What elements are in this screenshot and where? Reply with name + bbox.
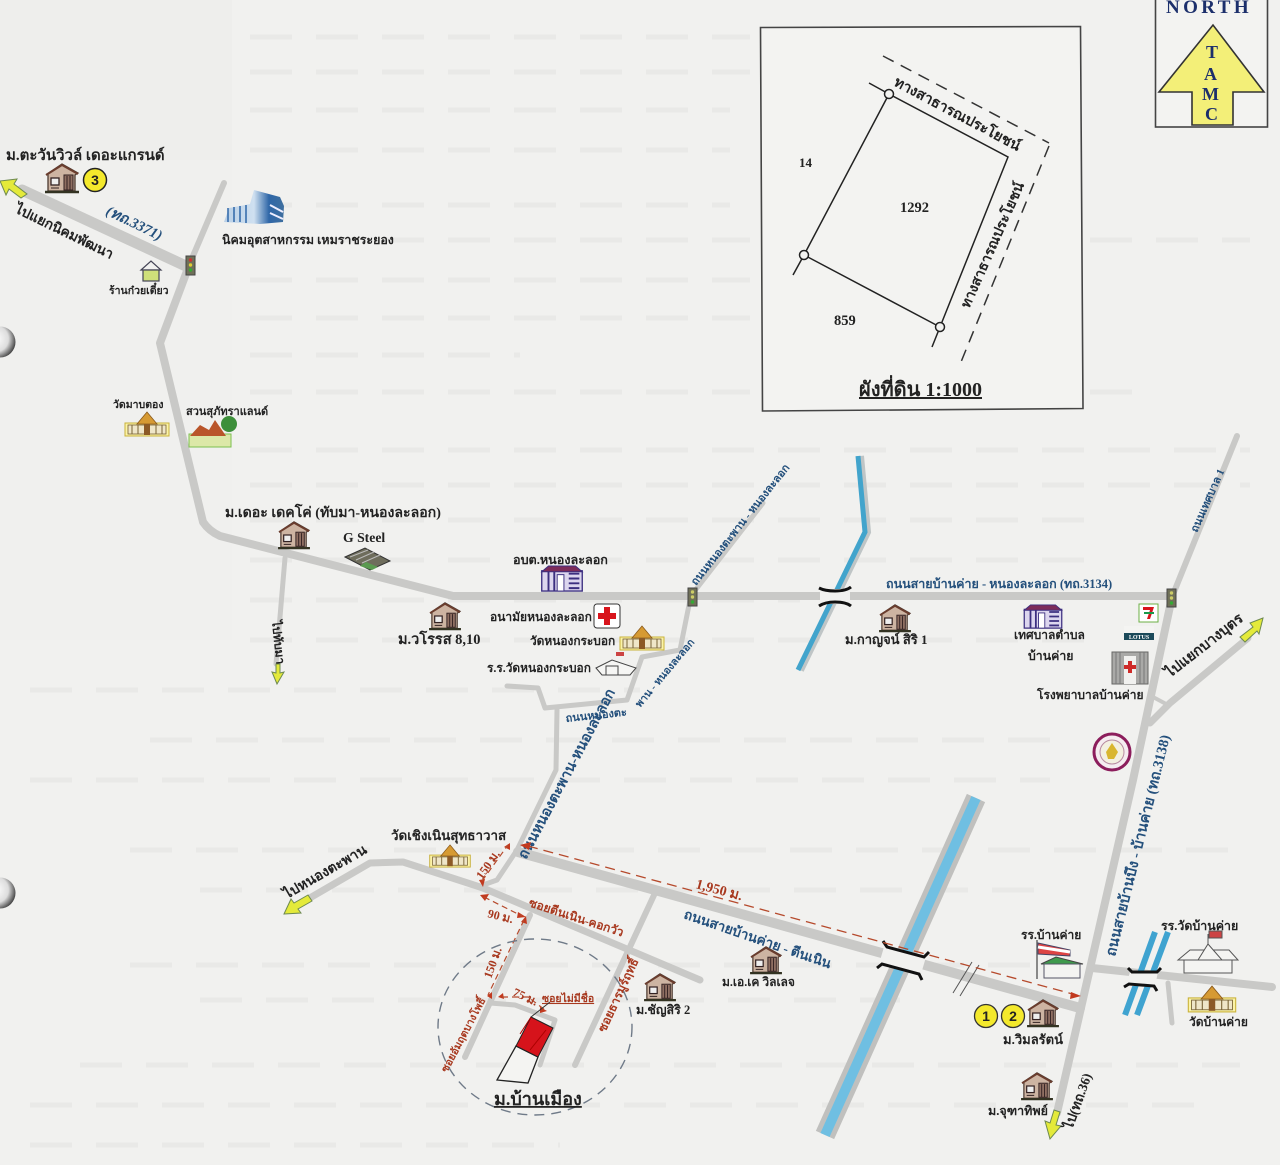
label: hospital: โรงพยาบาลบ้านค่าย	[1036, 687, 1144, 702]
parcel plan panel: 1292	[900, 200, 929, 216]
north arrow panel: M	[1202, 84, 1219, 104]
parcel plan panel: 859	[834, 313, 856, 329]
icon: noodle shop	[141, 261, 161, 281]
road label 3134: ถนนสายบ้านค่าย - หนองละลอก (ทถ.3134)	[886, 577, 1112, 591]
marker 3	[84, 168, 106, 192]
label: noodle shop: ร้านก๋วยเตี๋ยว	[109, 282, 169, 297]
parcel numbers: 14	[799, 155, 812, 170]
binder hole: lower	[0, 878, 16, 908]
distance labels: 150 ม.	[473, 848, 503, 882]
north arrow panel: C	[1205, 104, 1218, 124]
icon: house The Deco	[278, 522, 310, 548]
road label: Nong Tapan vertical: ถนนหนองตะพาน-หนองละลอก	[515, 686, 619, 862]
icon: municipal office	[1024, 605, 1062, 628]
icon: Ban Khai school	[1037, 940, 1083, 979]
parcel plan panel	[760, 26, 1083, 411]
label: Ban Khai school: รร.บ้านค่าย	[1021, 928, 1081, 942]
icon: hospital building	[1112, 652, 1148, 684]
label: The Deco: ม.เดอะ เดคโค่ (ทับมา-หนองละลอก)	[225, 503, 441, 521]
road network	[22, 183, 1272, 1113]
road label: Nong Tapan south 3: พาน - หนองละลอก	[634, 637, 697, 710]
label: to Bang But: ไปแยกบางบุตร	[1160, 609, 1247, 682]
icon: temple Nong Krabok	[620, 626, 664, 650]
distance labels: 150 ม.	[481, 945, 505, 980]
icon: school Nong Krabok	[596, 652, 636, 675]
icon: emblem	[1094, 734, 1130, 770]
label: SK Village: ม.เอ.เค วิลเลจ	[722, 975, 795, 989]
label: Wat Map Tong: วัดมาบตอง	[113, 399, 163, 411]
distance arrowheads	[479, 842, 1081, 1013]
distance labels	[473, 848, 744, 1009]
icon: house Kanchan	[879, 605, 911, 631]
traffic light: east junction	[1167, 589, 1176, 607]
icon: SAO office	[542, 566, 582, 591]
label: to Thapma: ไปทับมา	[269, 618, 289, 665]
bridge: east canal	[1124, 968, 1161, 991]
label: Suan Supatra Land: สวนสุภัทราแลนด์	[186, 405, 268, 419]
north arrow panel	[1156, 0, 1268, 127]
plan caption: ผังที่ดิน 1:1000	[859, 374, 982, 401]
distance: 1950 dashed	[528, 846, 1080, 996]
label: Soi Tin Noen: ซอยตีนเนิน-คอกวัว	[527, 896, 626, 939]
road label: Nong Tapan south 2: ถนนหนองตะ	[565, 707, 628, 725]
bridge: road 3134	[819, 587, 851, 606]
label: health station: อนามัยหนองละลอก	[490, 610, 592, 624]
icon: house Woraras	[429, 603, 461, 629]
road label 3371: (ทถ.3371)	[103, 203, 165, 244]
road label 3138: ถนนสายบ้านบึง - บ้านค่าย (ทถ.3138)	[1102, 733, 1174, 958]
icon: house Wimonrat	[1027, 1000, 1059, 1026]
label: Soi Nong Pho: ซอยอัมฤตบางโพธิ์	[436, 993, 489, 1074]
railway crossing mark	[953, 962, 979, 996]
north arrow panel: T	[1206, 42, 1218, 62]
icon: Tesco Lotus	[1124, 626, 1154, 641]
distance labels: 90 ม.	[486, 906, 515, 926]
distance labels: 75 ม.	[511, 985, 540, 1009]
icon: temple Choeng Noen	[430, 845, 470, 867]
binder hole: upper	[0, 326, 16, 358]
icon: house 3	[45, 164, 79, 192]
label: municipality: เทศบาลตำบล	[1014, 628, 1085, 642]
label: unnamed soi: ซอยไม่มีชื่อ	[542, 990, 594, 1005]
road label: Ban Khai Tin Noen: ถนนสายบ้านค่าย - ตีนเนิน	[682, 907, 834, 971]
label: Kanchan Siri 1: ม.กาญจน์ สิริ 1	[845, 632, 928, 648]
label: Ban Mueang: ม.บ้านเมือง	[494, 1089, 582, 1109]
distance labels: 1,950 ม.	[694, 877, 744, 904]
label: Wat Nong Krabok: วัดหนองกระบอก	[530, 634, 615, 648]
marker 1	[974, 1004, 998, 1028]
label: to Nong Tapan: ไปหนองตะพาน	[278, 840, 370, 903]
project area circle	[438, 939, 632, 1115]
marker 1: 1	[982, 1008, 990, 1024]
road label north: ทางสาธารณประโยชน์	[891, 73, 1024, 155]
icon: Tesco Lotus: LOTUS	[1129, 635, 1150, 641]
marker 3: 3	[91, 172, 99, 188]
icon: park resort	[189, 416, 237, 447]
label: to Nikhom Phatthana: ไปแยกนิคมพัฒนา	[11, 199, 116, 262]
canal: central	[825, 798, 976, 1135]
icon: temple Map Tong	[125, 412, 169, 436]
label: Ban Khai: บ้านค่าย	[1028, 649, 1073, 663]
traffic light: north junction	[186, 256, 195, 275]
icon: house SK Village	[750, 947, 782, 973]
label: Chutathip: ม.จุฑาทิพย์	[988, 1103, 1048, 1119]
label: Industrial estate: นิคมอุตสาหกรรม เหมราชระยอง	[222, 233, 394, 248]
marker 2	[1002, 1004, 1024, 1028]
label: Wat Ban Khai school: รร.วัดบ้านค่าย	[1161, 919, 1238, 933]
north arrow panel: A	[1204, 64, 1217, 84]
icon: house Chanya	[644, 974, 676, 1000]
label: SAO office: อบต.หนองละลอก	[513, 553, 608, 567]
icon: industrial estate	[224, 190, 284, 224]
canal: north	[798, 456, 867, 670]
marker 2: 2	[1009, 1008, 1017, 1024]
label: Woraras: ม.วโรรส 8,10	[398, 630, 481, 648]
label: Wat Nong Krabok school: ร.ร.วัดหนองกระบอก	[487, 661, 591, 675]
icon: temple Ban Khai	[1188, 986, 1236, 1012]
project site	[497, 1002, 553, 1083]
icon: factory G Steel	[345, 548, 390, 570]
icon: 7-Eleven	[1139, 604, 1158, 622]
icon: Wat Ban Khai school	[1178, 931, 1238, 973]
icon: house Chutathip	[1021, 1073, 1053, 1099]
road label: to 36: ไป(ทถ.36)	[1059, 1071, 1095, 1133]
road label east: ทางสาธารณประโยชน์	[956, 179, 1028, 311]
canal: east double	[1125, 932, 1168, 1015]
label: G Steel: G Steel	[343, 530, 385, 545]
traffic light: centre junction	[688, 588, 697, 606]
road label: Nong Tapan north: ถนนหนองตะพาน - หนองละลอก	[689, 462, 793, 588]
icon: red cross	[594, 604, 620, 628]
road label: Thetsaban 1: ถนนเทศบาล 1	[1189, 467, 1227, 534]
parcel boundary	[793, 56, 1049, 362]
label: Wimonrat: ม.วิมลรัตน์	[1003, 1032, 1063, 1047]
label: Soi Mu Rit: ซอยธารมูร์ฤทธิ์	[593, 954, 643, 1035]
label: Tawan View The Grand: ม.ตะวันวิวล์ เดอะแกรนด์	[6, 146, 165, 164]
distance dashed segments	[482, 845, 545, 1010]
bridge: central canal	[877, 941, 929, 980]
label: Wat Choeng Noen: วัดเชิงเนินสุทธาวาส	[391, 828, 507, 844]
label: Wat Ban Khai: วัดบ้านค่าย	[1189, 1015, 1248, 1029]
label: Chanya Siri 2: ม.ชัญสิริ 2	[636, 1003, 690, 1017]
